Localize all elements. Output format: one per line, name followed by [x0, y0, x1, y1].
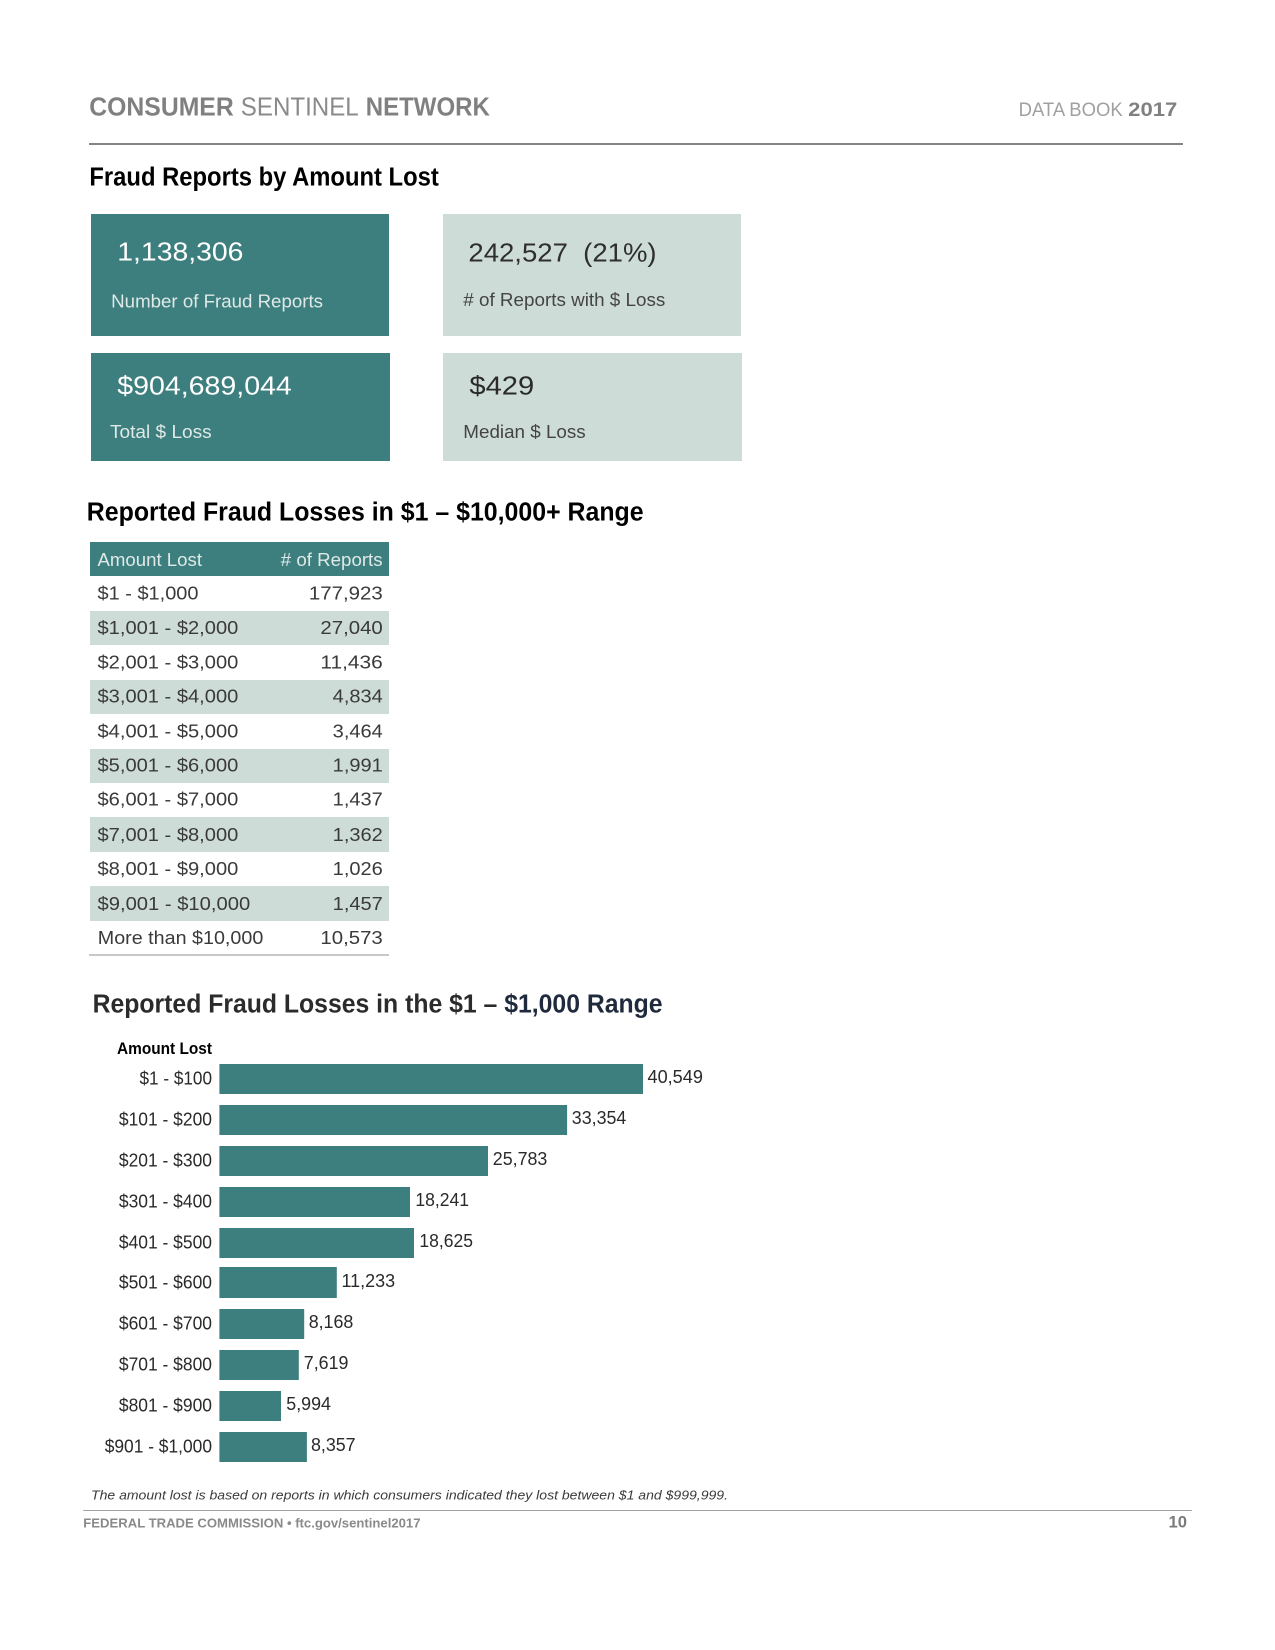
- panel: summary statistics: [91, 214, 742, 461]
- stat card: total loss: Total $ Loss: [110, 421, 212, 442]
- bar: $301 - $400: $301 - $400: [119, 1190, 212, 1211]
- table row: $9,001 - $10,000: 1,457: [333, 893, 383, 914]
- table row: $8,001 - $9,000: $8,001 - $9,000: [98, 858, 238, 879]
- header title: Consumer Sentinel Network: [89, 92, 490, 122]
- table row: $3,001 - $4,000: $3,001 - $4,000: [98, 686, 238, 707]
- table row: $2,001 - $3,000: 11,436: [320, 652, 383, 673]
- bar: $401 - $500: [119, 1228, 473, 1258]
- bar: $601 - $700: [119, 1309, 353, 1339]
- table header row: [90, 542, 389, 576]
- bar: $201 - $300: $201 - $300: [119, 1149, 212, 1170]
- header title: Consumer Sentinel Network: CONSUMER: [89, 92, 234, 122]
- table row: $2,001 - $3,000: $2,001 - $3,000: [98, 652, 238, 673]
- table row: $4,001 - $5,000: [98, 721, 383, 742]
- table row: $6,001 - $7,000: $6,001 - $7,000: [98, 789, 238, 810]
- table row: $5,001 - $6,000: $5,001 - $6,000: [98, 755, 238, 776]
- heading: Reported Fraud Losses in the $1 – $1,000 Range: Reported Fraud Losses in the $1 – $1,000 Range: [93, 991, 663, 1019]
- bar: $501 - $600: [119, 1267, 395, 1298]
- table header row: # of Reports: [281, 549, 383, 570]
- axis title: Amount Lost: Amount Lost: [117, 1039, 212, 1058]
- table row: $2,001 - $3,000: [98, 652, 383, 673]
- table row: More than $10,000: More than $10,000: [98, 927, 263, 948]
- bar: $901 - $1,000: [105, 1432, 356, 1462]
- table row: More than $10,000: [98, 927, 383, 948]
- bar: $501 - $600: $501 - $600: [119, 1271, 212, 1292]
- bar: $801 - $900: 5,994: [286, 1393, 331, 1414]
- header: [89, 92, 1183, 145]
- table row: $4,001 - $5,000: 3,464: [333, 721, 383, 742]
- table row: $1,001 - $2,000: $1,001 - $2,000: [98, 617, 238, 638]
- table row: $7,001 - $8,000: [90, 817, 389, 852]
- table row: $6,001 - $7,000: [98, 789, 383, 810]
- table row: $4,001 - $5,000: $4,001 - $5,000: [98, 721, 238, 742]
- bar: $701 - $800: $701 - $800: [119, 1353, 212, 1374]
- table row: $6,001 - $7,000: 1,437: [333, 789, 383, 810]
- bar: $701 - $800: [119, 1350, 348, 1380]
- heading: Reported Fraud Losses in $1 – $10,000+ Range: Reported Fraud Losses in $1 – $10,000+ Range: [87, 499, 644, 527]
- header title: Consumer Sentinel Network: SENTINEL: [241, 92, 359, 122]
- footer: [83, 1510, 1192, 1531]
- table row: $9,001 - $10,000: $9,001 - $10,000: [98, 893, 250, 914]
- bar: $1 - $100: [140, 1064, 703, 1094]
- table row: More than $10,000: 10,573: [320, 927, 383, 948]
- bar: $501 - $600: 11,233: [342, 1270, 395, 1291]
- bar: $901 - $1,000: $901 - $1,000: [105, 1435, 212, 1456]
- header: Data Book 2017: 2017: [1128, 99, 1177, 121]
- table row: $7,001 - $8,000: $7,001 - $8,000: [98, 824, 238, 845]
- footer source text: FEDERAL TRADE COMMISSION • ftc.gov/sentinel2017: [83, 1516, 421, 1531]
- bar: $601 - $700: 8,168: [309, 1311, 353, 1332]
- stat card: median loss: $429: [469, 370, 534, 400]
- bar: $201 - $300: [119, 1146, 547, 1176]
- stat card: reports with loss: # of Reports with $ Loss: [463, 289, 665, 310]
- table row: $1,001 - $2,000: [90, 611, 389, 645]
- table row: $3,001 - $4,000: [90, 680, 389, 714]
- table: fraud losses by amount: [89, 542, 389, 956]
- bar: $301 - $400: [119, 1187, 469, 1217]
- table row: $3,001 - $4,000: 4,834: [333, 686, 383, 707]
- bar: $401 - $500: $401 - $500: [119, 1231, 212, 1252]
- stat card: number of fraud reports: 1,138,306: [117, 237, 243, 267]
- bar: $801 - $900: $801 - $900: [119, 1394, 212, 1415]
- table row: $1,001 - $2,000: 27,040: [320, 617, 383, 638]
- bar: $101 - $200: 33,354: [572, 1107, 626, 1128]
- header title: Consumer Sentinel Network: NETWORK: [366, 92, 490, 122]
- heading: Fraud Reports by Amount Lost: Fraud Reports by Amount Lost: [89, 163, 439, 191]
- stat card: median loss: Median $ Loss: [463, 421, 586, 442]
- table row: $1 - $1,000: 177,923: [309, 583, 383, 604]
- header: Data Book 2017: [1019, 99, 1177, 121]
- table row: $9,001 - $10,000: [90, 886, 389, 921]
- stat card: total loss: $904,689,044: [117, 370, 292, 400]
- bar: $901 - $1,000: 8,357: [311, 1434, 356, 1455]
- bar: $701 - $800: 7,619: [304, 1352, 348, 1373]
- bar: $1 - $100: $1 - $100: [140, 1067, 212, 1088]
- bar: $101 - $200: $101 - $200: [119, 1108, 212, 1129]
- table header row: Amount Lost: [98, 549, 202, 570]
- table row: $5,001 - $6,000: 1,991: [333, 755, 383, 776]
- stat card: reports with loss: [443, 214, 741, 336]
- bar: $601 - $700: $601 - $700: [119, 1312, 212, 1333]
- table row: $1 - $1,000: [98, 583, 383, 604]
- bar chart: fraud losses from $1 to $1,000: [105, 1039, 703, 1462]
- table row: $1 - $1,000: $1 - $1,000: [98, 583, 198, 604]
- bar: $101 - $200: [119, 1105, 626, 1135]
- table row: $7,001 - $8,000: 1,362: [333, 824, 383, 845]
- bar: $201 - $300: 25,783: [493, 1148, 547, 1169]
- stat card: number of fraud reports: Number of Fraud Reports: [111, 290, 323, 311]
- stat card: reports with loss: 242,527 (21%): [468, 238, 657, 268]
- table row: $8,001 - $9,000: 1,026: [333, 858, 383, 879]
- table row: $5,001 - $6,000: [90, 749, 389, 783]
- stat card: median loss: [443, 353, 742, 461]
- bar: $301 - $400: 18,241: [415, 1189, 469, 1210]
- footnote: The amount lost is based on reports in which consumers indicated they lost between $1 and $999,999.: [91, 1488, 728, 1502]
- bar: $401 - $500: 18,625: [419, 1230, 473, 1251]
- stat card: total loss: [91, 353, 390, 461]
- stat card: number of fraud reports: [91, 214, 389, 336]
- bar: $801 - $900: [119, 1391, 331, 1421]
- header: Data Book 2017: DATA BOOK: [1019, 99, 1123, 121]
- bar: $1 - $100: 40,549: [648, 1066, 703, 1087]
- table row: $8,001 - $9,000: [98, 858, 383, 879]
- page number: 10: [1168, 1513, 1187, 1531]
